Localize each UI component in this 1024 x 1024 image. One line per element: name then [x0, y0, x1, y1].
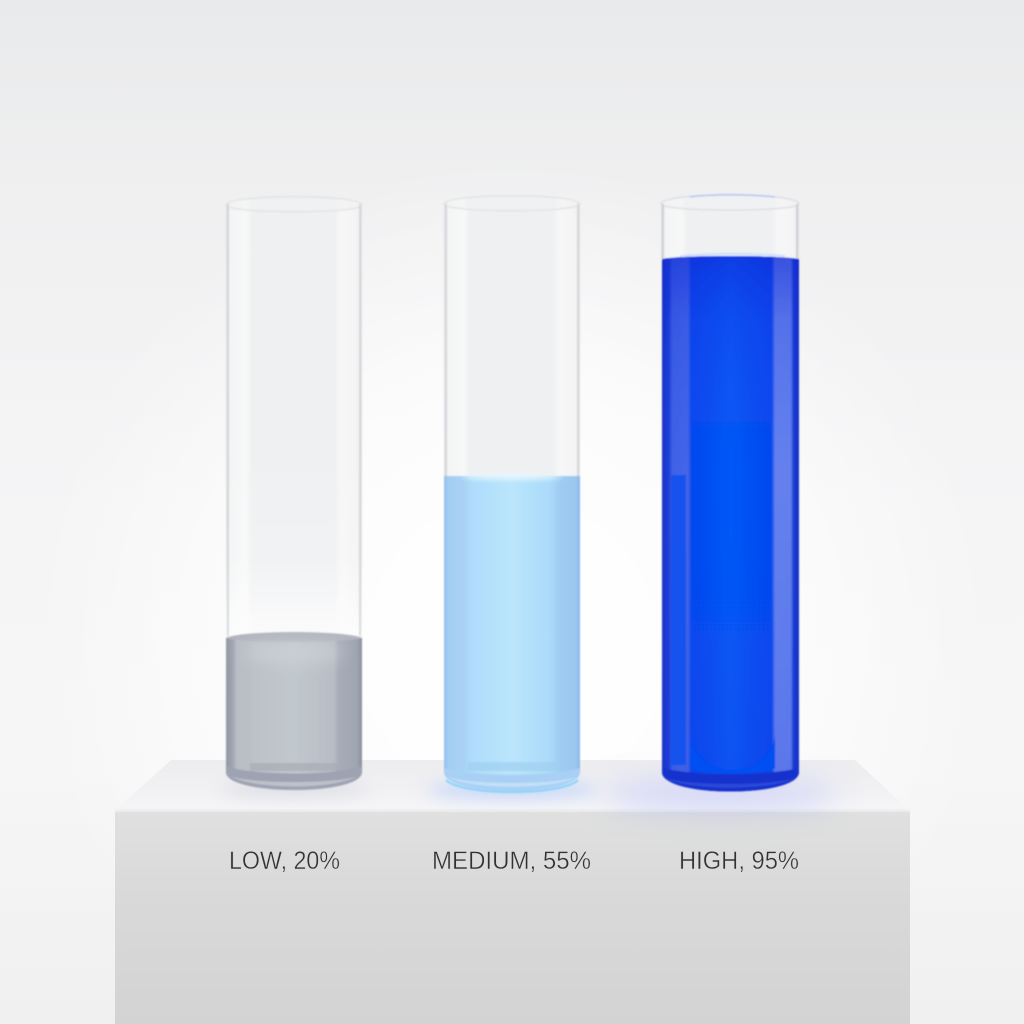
empty glass: low	[226, 198, 362, 640]
label: high: HIGH, 95%	[679, 847, 799, 875]
glass edge: medium	[446, 204, 578, 476]
empty glass: high	[661, 195, 799, 260]
inner reflection: high	[671, 475, 686, 765]
label: medium: MEDIUM, 55%	[432, 847, 591, 875]
empty glass: medium	[444, 196, 580, 480]
liquid: medium	[444, 476, 580, 791]
glass edge: low	[228, 204, 360, 636]
glass rim: high	[661, 195, 799, 210]
base: medium	[444, 768, 580, 791]
liquid: high	[662, 256, 799, 792]
label: low: LOW, 20%	[229, 847, 340, 875]
liquid surface: low	[226, 632, 362, 642]
shadows and glows on pedestal	[219, 781, 840, 808]
cylinder: medium	[444, 196, 580, 792]
liquid: low	[226, 633, 362, 790]
glass rim: low	[226, 197, 362, 212]
glow at rim: high	[690, 195, 775, 197]
base: low	[226, 766, 362, 790]
cylinder: low	[226, 197, 362, 790]
pedestal	[115, 760, 910, 1024]
cylinder: high	[661, 195, 799, 792]
glass edge: high	[663, 204, 797, 258]
base: high	[690, 735, 775, 774]
glass rim: medium	[444, 196, 580, 211]
surface highlight: high	[680, 254, 785, 256]
liquid glow: medium	[462, 474, 562, 480]
